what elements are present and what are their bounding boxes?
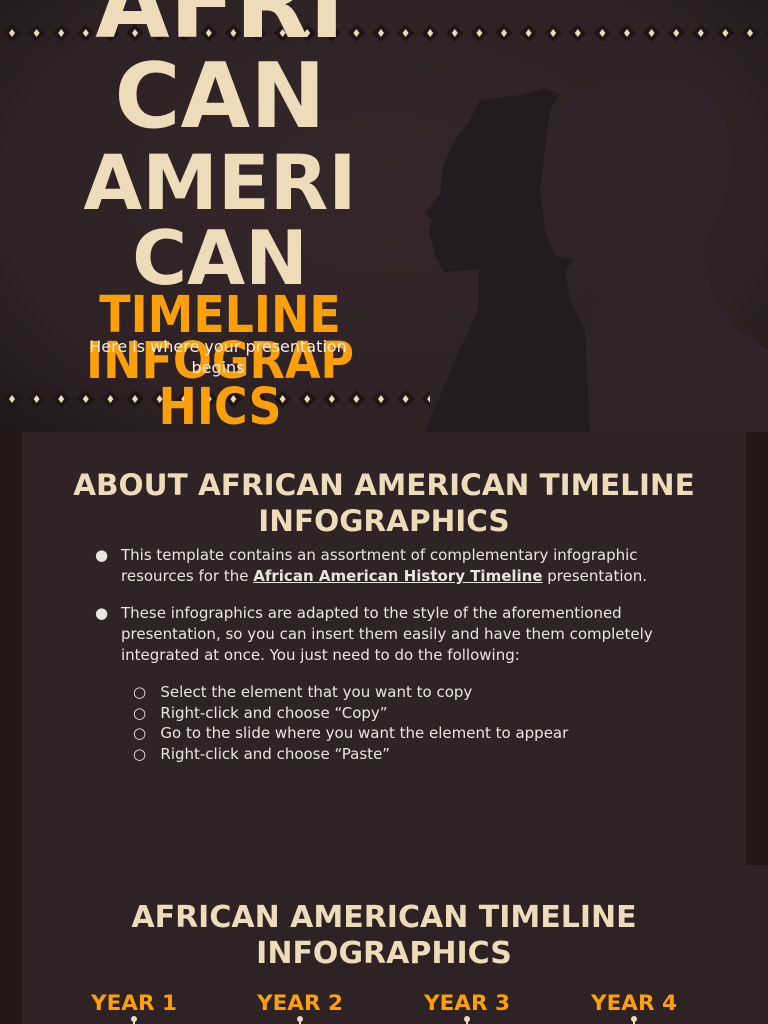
timeline markers bbox=[131, 1016, 637, 1024]
panel: timeline: YEAR 4 bbox=[591, 991, 677, 1016]
title: TIMELINE INFOGRAPHICS: INFOGRAP bbox=[86, 332, 354, 391]
title: AFRICAN AMERICAN: CAN bbox=[132, 214, 308, 302]
text block: bullets bbox=[95, 546, 653, 763]
panel: timeline: YEAR 2 bbox=[257, 991, 343, 1016]
text block: bullets: ○ Select the element that you want to copy bbox=[133, 683, 472, 701]
title: TIMELINE INFOGRAPHICS bbox=[86, 286, 354, 432]
text block: bullets: This template contains an assortment of complementary infographic resources for the African American History Timeline presentation. bbox=[121, 546, 647, 585]
text block: bullets: ○ Go to the slide where you want the element to appear bbox=[133, 724, 568, 742]
title: AFRICAN AMERICAN: CAN bbox=[114, 44, 326, 149]
panel: about bbox=[0, 432, 768, 865]
heading: about: ABOUT AFRICAN AMERICAN TIMELINE INFOGRAPHICS bbox=[73, 468, 695, 538]
panel: timeline: YEAR 3 bbox=[424, 991, 510, 1016]
text block: bullets: ○ Right-click and choose “Paste” bbox=[133, 745, 390, 763]
panel: timeline bbox=[0, 865, 768, 1024]
title: AFRICAN AMERICAN: AMERI bbox=[83, 138, 357, 227]
text block: bullets: ● bbox=[95, 546, 108, 564]
title: AFRICAN AMERICAN bbox=[83, 0, 357, 302]
text block: bullets: ○ Right-click and choose “Copy” bbox=[133, 704, 388, 722]
text block: bullets: These infographics are adapted to the style of the aforementioned presentation, so you can insert them easily and have them completely integrated at once. You just need to do the following: bbox=[121, 604, 653, 664]
panel: hero bbox=[0, 0, 768, 432]
illustration: silhouettes bbox=[425, 88, 768, 432]
text block: bullets: ● bbox=[95, 604, 108, 622]
subtitle: Here is where your presentation begins bbox=[89, 337, 347, 377]
decorative diamond row top bbox=[4, 24, 768, 42]
title: TIMELINE INFOGRAPHICS: TIMELINE bbox=[99, 286, 341, 345]
labels: years: YEAR 1 bbox=[91, 991, 177, 1016]
heading: timeline: AFRICAN AMERICAN TIMELINE INFOGRAPHICS bbox=[131, 900, 637, 971]
